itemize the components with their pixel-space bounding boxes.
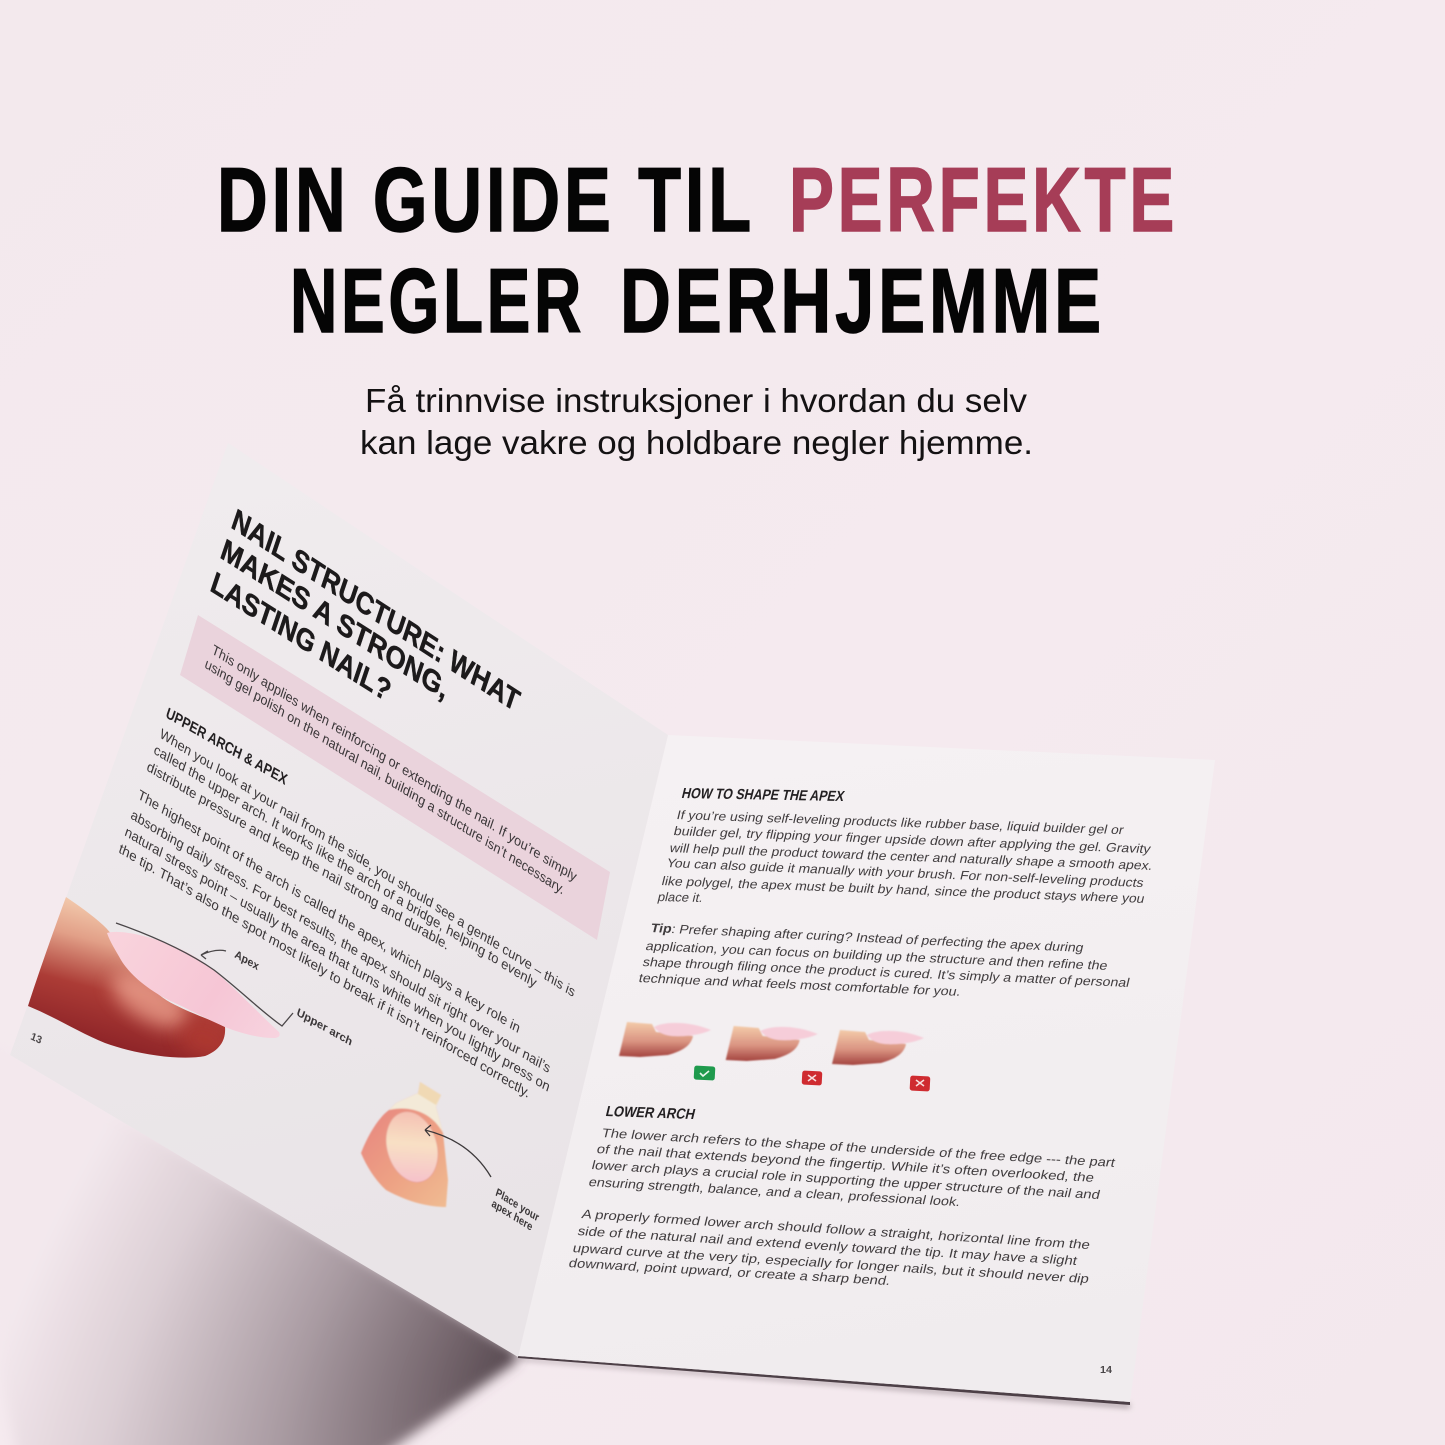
heading: nail structure: MAKES A STRONG, — [217, 533, 453, 706]
text block: apex: natural stress point – usually the area that turns white when you lightly press on — [123, 824, 552, 1095]
text block: apex: the tip. That’s also the spot most likely to break if it isn’t reinforced correctly. — [117, 841, 532, 1101]
title: DIN GUIDE TIL — [217, 150, 755, 251]
illustration: incorrect apex nail two — [832, 1030, 924, 1065]
text block: apex instructions: like polygel, the apex must be built by hand, since the product stays where you — [660, 873, 1146, 906]
heading: lower arch: LOWER ARCH — [604, 1103, 697, 1123]
label: upper arch: Upper arch — [295, 1006, 354, 1049]
text block: upper arch: When you look at your nail from the side, you should see a gentle curve – this is — [158, 726, 577, 1000]
text block: lower arch intro: ensuring strength, balance, and a clean, professional look. — [587, 1174, 962, 1209]
text block: upper arch: called the upper arch. It works like the arch of a bridge, helping to evenly — [152, 742, 539, 991]
title: PERFEKTE — [789, 150, 1178, 251]
text block: tip: application, you can focus on building up the structure and then refine the — [644, 938, 1109, 973]
illustration: correct apex nail — [619, 1022, 711, 1057]
heading: nail structure: NAIL STRUCTURE: WHAT — [228, 503, 523, 719]
heading: how to shape the apex: HOW TO SHAPE THE APEX — [680, 785, 846, 805]
text block: apex instructions: will help pull the product toward the center and naturally shape a smooth apex. — [667, 840, 1154, 873]
text block: lower arch details — [567, 1206, 1092, 1288]
illustration: incorrect apex nail one — [726, 1026, 818, 1061]
text block: tip: shape through filing once the product is cured. It’s simply a matter of personal — [641, 954, 1131, 990]
text block: lower arch intro: of the nail that extends beyond the fingertip. While it’s often overlooked, the — [595, 1141, 1096, 1185]
text block: apex instructions: You can also guide it manually with your brush. For non-self-leveling products — [665, 855, 1145, 890]
icon: red cross one — [802, 1070, 822, 1086]
callout: upper arch line — [116, 923, 293, 1026]
illustration: top view of finger with apex — [361, 1082, 448, 1207]
subtitle — [360, 382, 1033, 461]
text block: upper arch: distribute pressure and keep the nail strong and durable. — [145, 759, 451, 953]
text block: apex instructions — [656, 807, 1154, 906]
text block: apex instructions: If you’re using self-leveling products like rubber base, liquid builder gel or — [675, 807, 1126, 837]
arrow: apex — [201, 950, 226, 959]
infographic canvas — [10, 166, 1172, 1445]
panel: left page — [10, 443, 668, 1357]
page number 13: 13 — [29, 1031, 43, 1047]
right page shadow edge — [518, 1356, 1130, 1408]
title — [217, 150, 1178, 352]
text block: apex: The highest point of the arch is called the apex, which plays a key role in — [136, 787, 522, 1036]
booklet — [12, 508, 1151, 1411]
text block: apex instructions: builder gel, try flipping your finger upside down after applying the gel. Gravity — [672, 823, 1153, 856]
panel: right page — [518, 735, 1215, 1402]
text block: lower arch details: side of the natural nail and extend evenly toward the tip. It may have a slight — [576, 1223, 1079, 1268]
illustration: side view of finger with nail — [28, 897, 280, 1064]
text block: tip: technique and what feels most comfortable for you. — [637, 970, 963, 999]
label: place your apex here: apex here — [490, 1197, 534, 1234]
subtitle: kan lage vakre og holdbare negler hjemme. — [360, 424, 1033, 461]
text block: tip — [637, 920, 1131, 999]
text block: lower arch intro: The lower arch refers to the shape of the underside of the free edge --- the part — [600, 1125, 1117, 1170]
arrow: place your apex — [425, 1125, 491, 1177]
text block: lower arch intro: lower arch plays a crucial role in supporting the upper structure of the nail and — [590, 1157, 1102, 1202]
text block: lower arch details: upward curve at the very tip, especially for longer nails, but it should never dip — [571, 1240, 1091, 1286]
booklet cast shadow — [0, 1040, 518, 1445]
text block: lower arch intro — [587, 1125, 1117, 1209]
title: NEGLER — [290, 251, 585, 352]
label: apex: Apex — [233, 948, 261, 974]
text block: lower arch details: A properly formed lower arch should follow a straight, horizontal line from the — [580, 1206, 1092, 1252]
heading: nail structure: LASTING NAIL? — [207, 566, 395, 709]
icon: green check — [694, 1065, 715, 1081]
title: DERHJEMME — [620, 251, 1105, 352]
label: place your apex here: Place your — [494, 1186, 541, 1225]
text block: apex instructions: place it. — [656, 889, 705, 905]
text block: apex: absorbing daily stress. For best results, the apex should sit right over your nail’s — [129, 807, 553, 1076]
callout: pink note — [180, 615, 610, 940]
subtitle: Få trinnvise instruksjoner i hvordan du selv — [365, 382, 1028, 419]
icon: red cross two — [910, 1075, 930, 1092]
heading: upper arch and apex: UPPER ARCH & APEX — [164, 705, 289, 789]
page number 14: 14 — [1100, 1364, 1112, 1376]
text block: tip: Tip: Prefer shaping after curing? Instead of perfecting the apex during — [649, 920, 1085, 955]
callout: pink note: This only applies when reinforcing or extending the nail. If you’re simply — [210, 642, 579, 885]
text block: lower arch details: downward, point upward, or create a sharp bend. — [567, 1255, 892, 1288]
callout: pink note: using gel polish on the natural nail, building a structure isn’t necessary. — [203, 656, 567, 898]
